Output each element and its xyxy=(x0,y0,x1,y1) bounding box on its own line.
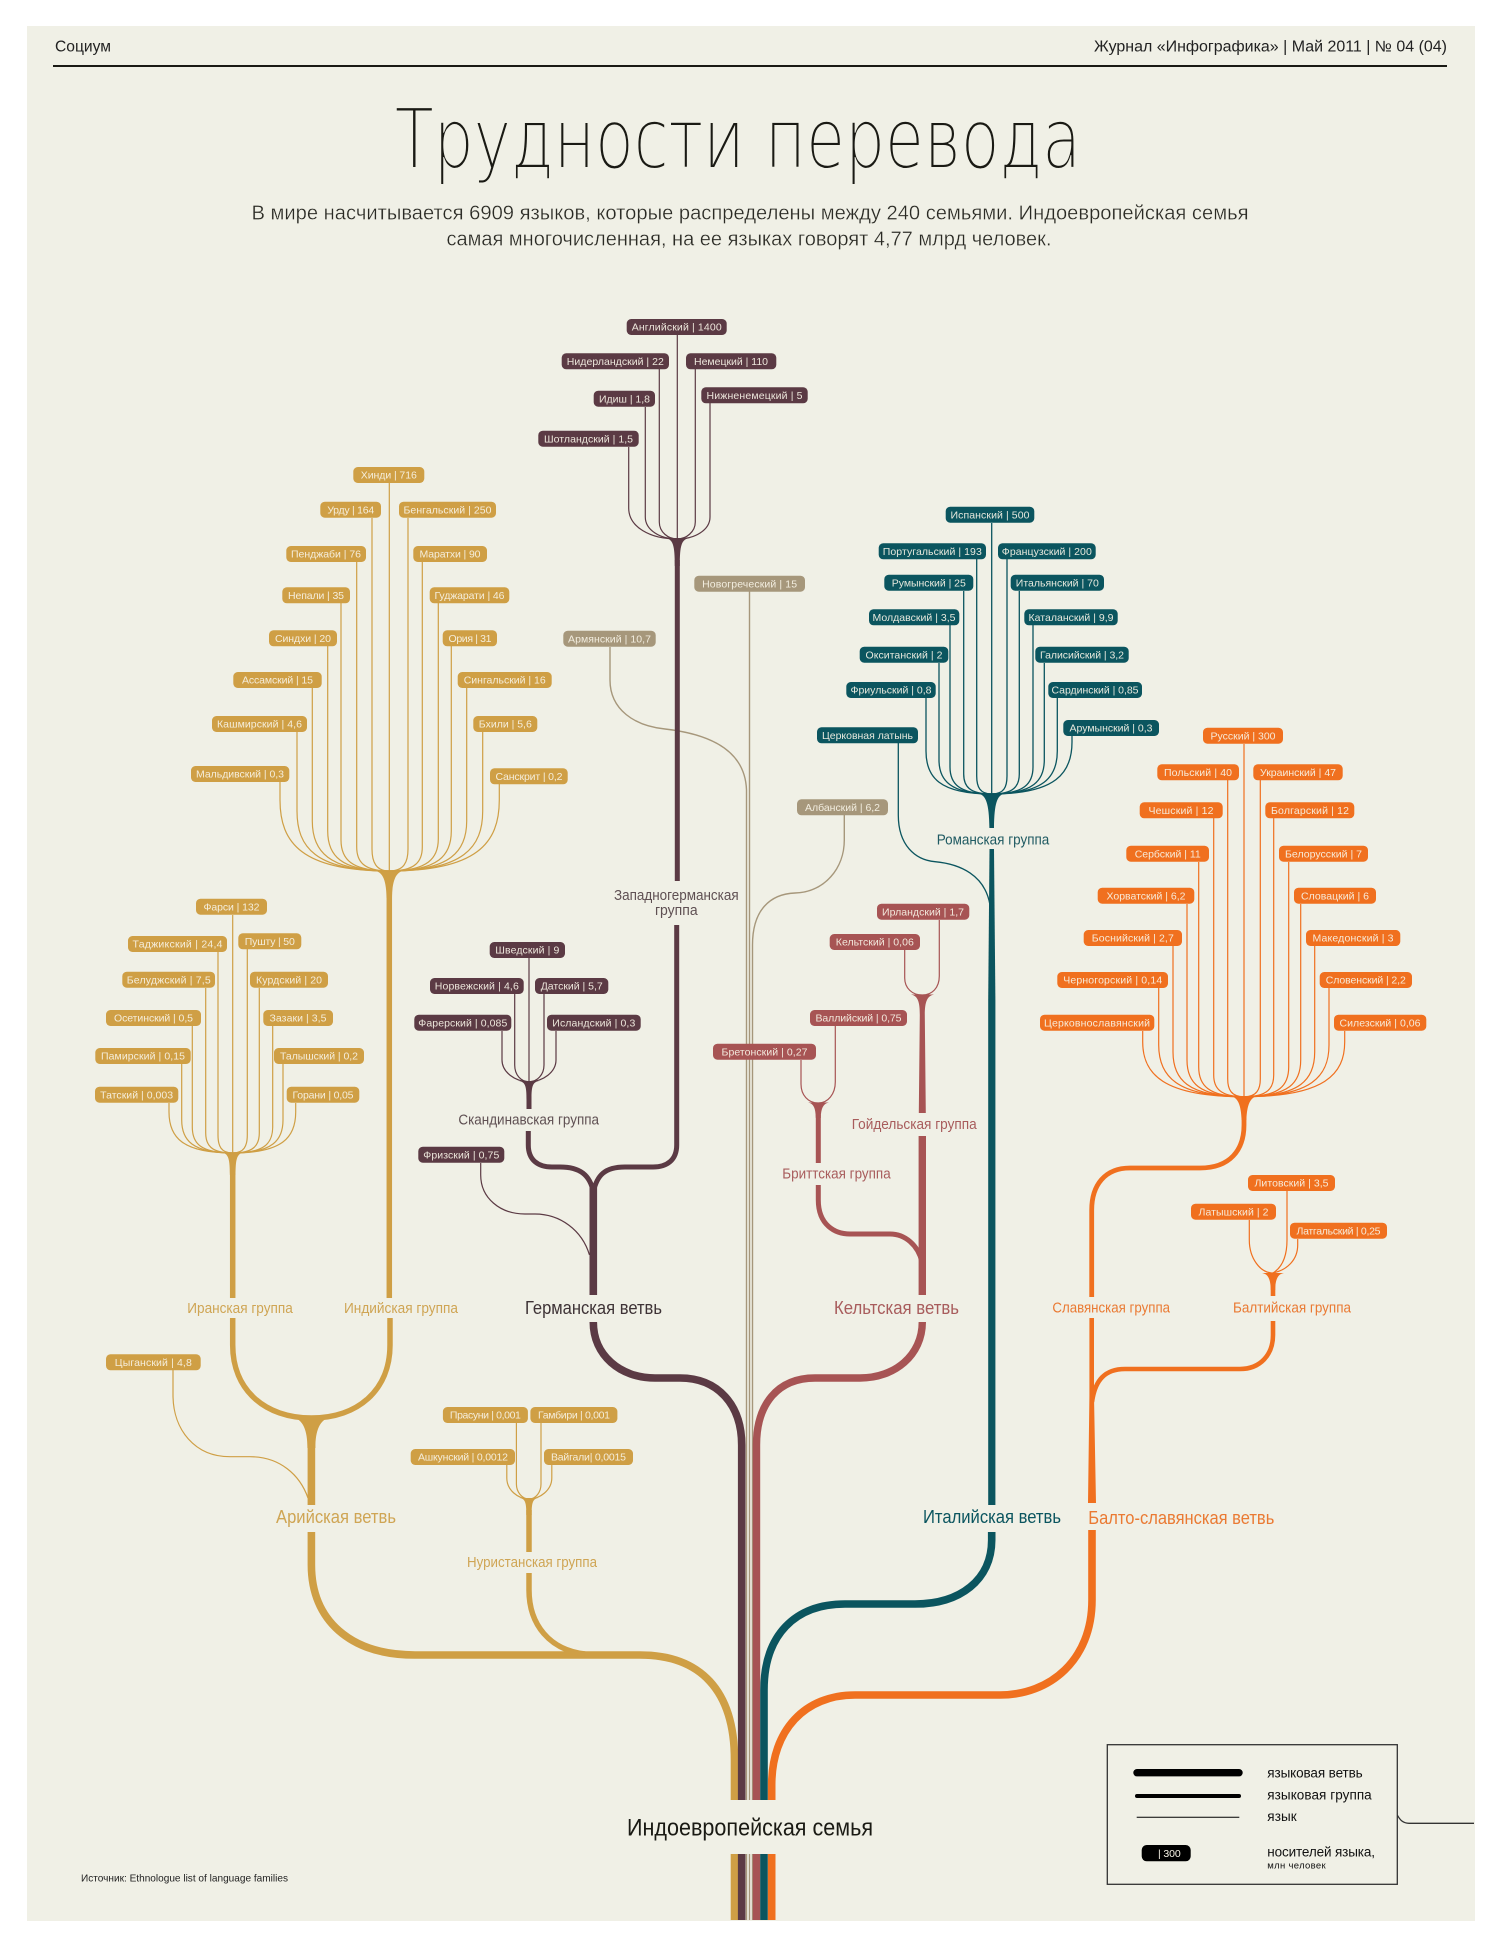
tag: Кашмирский xyxy=(212,716,307,732)
tag: Непали xyxy=(282,587,350,603)
labels: Balto-Slavic branch: Славянская группа xyxy=(1052,1301,1171,1317)
tag: Арумынский: Арумынский | 0,3 xyxy=(1070,723,1153,735)
magazine issue: Журнал «Инфографика» | Май 2011 | № 04 (04) xyxy=(1094,38,1447,56)
tag: Французский: Французский | 200 xyxy=(1002,546,1092,558)
tag: Идиш: Идиш | 1,8 xyxy=(599,393,650,405)
tag: Румынский: Румынский | 25 xyxy=(892,577,966,589)
tag: Галисийский: Галисийский | 3,2 xyxy=(1040,649,1124,661)
tag: Ория xyxy=(443,630,497,646)
labels: Balto-Slavic branch: Балто-славянская ветвь xyxy=(1088,1508,1274,1528)
tag: Таджикский: Таджикский | 24,4 xyxy=(132,939,223,951)
thick branches: Balto-Slavic xyxy=(772,1115,1273,1920)
branch: Germanic xyxy=(414,319,808,1920)
tag: Нижненемецкий xyxy=(701,387,808,403)
tag: Украинский xyxy=(1253,764,1343,780)
tag: Бретонский xyxy=(713,1044,816,1060)
language lines: Celtic xyxy=(801,920,939,1103)
tag: Ашкунский: Ашкунский | 0,0012 xyxy=(418,1452,508,1464)
thick branches: Italic xyxy=(764,1532,992,1920)
tag: Румынский xyxy=(884,575,973,591)
tag: Португальский: Португальский | 193 xyxy=(883,546,982,558)
tag: Памирский xyxy=(95,1048,191,1064)
thick branches: Aryan xyxy=(233,893,734,1920)
tag: Урду: Урду | 164 xyxy=(327,504,374,516)
tag: Фарерский: Фарерский | 0,085 xyxy=(418,1017,507,1029)
tag: Цыганский xyxy=(106,1354,201,1370)
language lines: West Germanic xyxy=(629,335,710,540)
labels: Celtic branch xyxy=(782,1117,978,1318)
branch: Celtic xyxy=(713,904,978,1920)
tag: Валлийский xyxy=(810,1010,907,1026)
tag: Испанский xyxy=(946,507,1034,523)
labels: Celtic branch: Гойдельская группа xyxy=(852,1117,978,1133)
tag: Кельтский: Кельтский | 0,06 xyxy=(836,937,914,949)
tag: Хинди: Хинди | 716 xyxy=(361,470,417,482)
tag: Нидерландский xyxy=(562,353,669,369)
tag: Немецкий: Немецкий | 110 xyxy=(694,356,768,368)
tag: Синдхи xyxy=(269,630,337,646)
tag: Нижненемецкий: Нижненемецкий | 5 xyxy=(706,390,803,402)
branch: Italic xyxy=(764,507,1159,1920)
thick branches: Germanic xyxy=(528,560,742,1920)
tag: Ашкунский xyxy=(411,1449,515,1465)
tag: Прасуни xyxy=(443,1407,528,1423)
tag: Португальский xyxy=(879,543,986,559)
legend: speakers tag: носителей языка, xyxy=(1267,1844,1375,1860)
tag: Черногорский: Черногорский | 0,14 xyxy=(1063,975,1162,987)
tag: Памирский: Памирский | 0,15 xyxy=(101,1051,185,1063)
tag: Датский xyxy=(535,978,608,994)
junction flares and taper: Balto-Slavic xyxy=(1088,1096,1284,1503)
tags: Indian group xyxy=(191,467,568,784)
labels: Italic branch: Романская группа xyxy=(937,832,1050,848)
tag: Сингальский xyxy=(458,672,552,688)
language lines: Scandinavian xyxy=(481,958,590,1255)
language lines: Slavic xyxy=(1143,744,1345,1098)
labels: Balto-Slavic branch xyxy=(1052,1301,1352,1528)
tags: Germanic xyxy=(414,319,808,1163)
tag: Бхили xyxy=(473,716,537,732)
tag: Словацкий: Словацкий | 6 xyxy=(1301,890,1369,902)
legend xyxy=(1107,1745,1397,1884)
tag: Синдхи: Синдхи | 20 xyxy=(275,633,331,645)
labels: Aryan branch: Иранская группа xyxy=(187,1301,294,1317)
legend: speakers tag: млн человек xyxy=(1267,1860,1327,1872)
tag: Фарси xyxy=(196,899,267,915)
title: Трудности перевода xyxy=(395,92,1081,188)
tag: Гамбири xyxy=(530,1407,617,1423)
tag: Мальдивский: Мальдивский | 0,3 xyxy=(196,769,284,781)
tag: Талышский xyxy=(274,1048,364,1064)
tag: Белорусский xyxy=(1279,846,1368,862)
tag: Нидерландский: Нидерландский | 22 xyxy=(567,356,664,368)
tag: Хорватский xyxy=(1098,888,1194,904)
labels: Balto-Slavic branch: Балтийская группа xyxy=(1233,1301,1352,1317)
tag: Фризский: Фризский | 0,75 xyxy=(423,1149,499,1161)
tag: Маратхи xyxy=(413,546,487,562)
tag: Арумынский xyxy=(1063,720,1159,736)
tag: Прасуни: Прасуни | 0,001 xyxy=(450,1410,521,1422)
tag: Литовский xyxy=(1248,1175,1335,1191)
connector lines: tan xyxy=(610,591,844,1920)
language lines: Romance xyxy=(898,523,1072,905)
tag: Норвежский xyxy=(430,978,524,994)
tag: Белорусский: Белорусский | 7 xyxy=(1285,848,1362,860)
tag: Курдский: Курдский | 20 xyxy=(256,974,322,986)
tag: Урду xyxy=(320,502,381,518)
tag: Вайгали: Вайгали| 0,0015 xyxy=(551,1452,626,1464)
tag: Английский: Английский | 1400 xyxy=(632,322,722,334)
section name: Социум xyxy=(55,38,111,56)
tag: Польский xyxy=(1157,764,1239,780)
tag: Фарси: Фарси | 132 xyxy=(204,901,260,913)
tag: Шотландский: Шотландский | 1,5 xyxy=(544,433,633,445)
labels: Aryan branch xyxy=(187,1301,598,1571)
tag: Окситанский: Окситанский | 2 xyxy=(866,649,943,661)
tag: Албанский xyxy=(797,799,888,815)
tag: Белуджский: Белуджский | 7,5 xyxy=(127,974,211,986)
tag: Чешский: Чешский | 12 xyxy=(1148,805,1214,817)
tag: Фриульский: Фриульский | 0,8 xyxy=(850,685,932,697)
labels: Aryan branch: Арийская ветвь xyxy=(276,1507,396,1527)
legend: language line: язык xyxy=(1267,1809,1297,1824)
tag: Церковная латынь: Церковная латынь xyxy=(822,730,914,742)
source: Источник: Ethnologue list of language families xyxy=(81,1872,288,1884)
tag: Английский xyxy=(627,319,727,335)
tag: Осетинский xyxy=(106,1010,201,1026)
tag: Польский: Польский | 40 xyxy=(1164,767,1232,779)
tag: Сардинский xyxy=(1048,682,1142,698)
junction flare and taper: Italic xyxy=(978,794,1005,1505)
tag: Курдский xyxy=(250,972,328,988)
subtitle xyxy=(252,202,1248,250)
tag: Исландский xyxy=(547,1015,641,1031)
tag: Македонский: Македонский | 3 xyxy=(1312,933,1394,945)
tag: Ирландский: Ирландский | 1,7 xyxy=(882,906,964,918)
tag: Македонский xyxy=(1306,930,1400,946)
tag: Пушту xyxy=(238,933,301,949)
tag: Гуджарати xyxy=(430,587,509,603)
tag: Украинский: Украинский | 47 xyxy=(1260,767,1336,779)
tag: Белуджский xyxy=(122,972,215,988)
labels: Germanic branch: Скандинавская группа xyxy=(458,1112,600,1128)
tag: Зазаки xyxy=(263,1010,333,1026)
tag: Горани: Горани | 0,05 xyxy=(292,1089,354,1101)
tag: Силезский: Силезский | 0,06 xyxy=(1340,1017,1421,1029)
tag: Хинди xyxy=(353,467,424,483)
tag: Мальдивский xyxy=(191,766,289,782)
tag: Санскрит: Санскрит | 0,2 xyxy=(496,771,563,783)
tag: Новогреческий xyxy=(694,576,805,592)
thick branches: Celtic xyxy=(756,1115,922,1920)
tag: Армянский xyxy=(563,631,656,647)
tag: Болгарский xyxy=(1265,802,1354,818)
tag: Армянский: Армянский | 10,7 xyxy=(568,633,651,645)
tag: Вайгали xyxy=(544,1449,633,1465)
tag: Фриульский xyxy=(846,682,936,698)
language lines: Iranian group xyxy=(169,915,308,1498)
tan languages: Greek, Armenian, Albanian xyxy=(563,576,888,1920)
tag: Шведский xyxy=(490,942,565,958)
tag: Боснийский xyxy=(1084,930,1182,946)
tag: Латышский xyxy=(1191,1204,1276,1220)
tag: Русский xyxy=(1203,728,1283,744)
labels: Celtic branch: Кельтская ветвь xyxy=(834,1298,959,1318)
tag: Пенджаби: Пенджаби | 76 xyxy=(291,549,361,561)
tag: Бретонский: Бретонский | 0,27 xyxy=(722,1046,808,1058)
tag: Гуджарати: Гуджарати | 46 xyxy=(434,590,505,602)
tag: Словацкий xyxy=(1294,888,1376,904)
family label: Индоевропейская семья xyxy=(627,1814,873,1842)
tag: Словенский: Словенский | 2,2 xyxy=(1326,975,1406,987)
tag: Чешский xyxy=(1140,802,1223,818)
tag: Каталанский xyxy=(1024,609,1118,625)
legend: branch line: языковая ветвь xyxy=(1267,1766,1363,1780)
labels: Celtic branch: Бриттская группа xyxy=(782,1166,892,1182)
tag: Датский: Датский | 5,7 xyxy=(541,981,603,993)
tag: Ория: Ория | 31 xyxy=(448,633,492,645)
labels: Germanic branch: группа xyxy=(655,903,699,919)
tag: Испанский: Испанский | 500 xyxy=(950,509,1030,521)
tag: Окситанский xyxy=(860,647,948,663)
tags: tan xyxy=(563,576,888,815)
tag: Литовский: Литовский | 3,5 xyxy=(1254,1178,1329,1190)
legend: speakers tag xyxy=(1142,1844,1375,1872)
junction flares and taper: Celtic xyxy=(808,994,934,1118)
tag: Татский: Татский | 0,003 xyxy=(100,1089,173,1101)
junction flares: Germanic xyxy=(519,538,690,1100)
legend: group line: языковая группа xyxy=(1267,1788,1372,1802)
tag: Непали: Непали | 35 xyxy=(288,590,344,602)
junction flares: Aryan xyxy=(222,870,538,1515)
tag: Латгальский: Латгальский | 0,25 xyxy=(1296,1225,1381,1237)
tag: Албанский: Албанский | 6,2 xyxy=(805,802,880,814)
tag: Латгальский xyxy=(1290,1223,1387,1239)
tag: Бенгальский: Бенгальский | 250 xyxy=(404,504,492,516)
tag: Словенский xyxy=(1320,972,1412,988)
tag: Шотландский xyxy=(538,431,639,447)
tag: Исландский: Исландский | 0,3 xyxy=(552,1017,635,1029)
tag: Боснийский: Боснийский | 2,7 xyxy=(1092,933,1174,945)
tag: Цыганский: Цыганский | 4,8 xyxy=(115,1357,192,1369)
tag: Церковнославянский: Церковнославянский xyxy=(1044,1017,1150,1029)
subtitle: В мире насчитывается 6909 языков, которые распределены между 240 семьями. Индоевропейская семья xyxy=(252,202,1248,224)
tag: Татский xyxy=(95,1087,178,1103)
tag: Галисийский xyxy=(1035,647,1129,663)
labels: Germanic branch xyxy=(458,888,739,1318)
tag: Сербский xyxy=(1126,846,1209,862)
labels: Italic branch: Италийская ветвь xyxy=(923,1507,1061,1527)
tags: Romance xyxy=(817,507,1159,743)
tag: Шведский: Шведский | 9 xyxy=(495,945,559,957)
tag: Новогреческий: Новогреческий | 15 xyxy=(702,578,797,590)
language lines: Baltic xyxy=(1249,1191,1298,1273)
tag: Церковная латынь xyxy=(817,727,918,743)
labels: Germanic branch: Германская ветвь xyxy=(525,1298,662,1318)
tag: Силезский xyxy=(1334,1015,1426,1031)
tag: Идиш xyxy=(594,391,655,407)
labels: Italic branch xyxy=(923,832,1061,1527)
tag: Молдавский: Молдавский | 3,5 xyxy=(872,612,956,624)
connector: legend to edge xyxy=(1397,1815,1474,1823)
tag: Зазаки: Зазаки | 3,5 xyxy=(270,1013,327,1025)
legend: speakers tag: | 300 xyxy=(1158,1848,1181,1860)
tag: Итальянский xyxy=(1011,575,1104,591)
labels: Aryan branch: Индийская группа xyxy=(344,1301,459,1317)
tag: Пушту: Пушту | 50 xyxy=(245,936,295,948)
tag: Черногорский xyxy=(1057,972,1168,988)
tag: Молдавский xyxy=(869,609,959,625)
language lines: Indian group xyxy=(280,483,499,872)
labels: Aryan branch: Нуристанская группа xyxy=(467,1555,598,1571)
tag: Фризский xyxy=(418,1147,504,1163)
tag: Латышский: Латышский | 2 xyxy=(1198,1206,1269,1218)
tag: Итальянский: Итальянский | 70 xyxy=(1016,577,1099,589)
branch: Aryan xyxy=(95,467,734,1920)
branch: Balto-Slavic xyxy=(772,728,1426,1920)
tags: Nuristani group xyxy=(411,1407,633,1465)
tag: Кашмирский: Кашмирский | 4,6 xyxy=(217,719,302,731)
tag: Ирландский xyxy=(877,904,969,920)
tag: Бенгальский xyxy=(399,502,496,518)
tag: Ассамский xyxy=(233,672,322,688)
header xyxy=(53,38,1447,67)
tag: Сардинский: Сардинский | 0,85 xyxy=(1052,685,1139,697)
tag: Болгарский: Болгарский | 12 xyxy=(1271,805,1349,817)
labels: Germanic branch: Западногерманская xyxy=(614,888,739,904)
tag: Валлийский: Валлийский | 0,75 xyxy=(816,1013,902,1025)
tags: Celtic xyxy=(713,904,969,1060)
tag: Горани xyxy=(287,1087,359,1103)
tag: Французский xyxy=(998,543,1096,559)
tag: Немецкий xyxy=(686,353,776,369)
tag: Кельтский xyxy=(830,934,920,950)
language lines: Nuristani group xyxy=(507,1423,552,1499)
tag: Хорватский: Хорватский | 6,2 xyxy=(1106,890,1186,902)
tag: Пенджаби xyxy=(286,546,366,562)
tag: Санскрит xyxy=(490,768,568,784)
tag: Бхили: Бхили | 5,6 xyxy=(479,719,532,731)
tag: Каталанский: Каталанский | 9,9 xyxy=(1028,612,1114,624)
tag: Таджикский xyxy=(128,936,227,952)
tags: Iranian group xyxy=(95,899,364,1370)
tag: Церковнославянский xyxy=(1040,1015,1154,1031)
tags: Slavic and Baltic xyxy=(1040,728,1426,1239)
tag: Норвежский: Норвежский | 4,6 xyxy=(435,981,519,993)
tag: Осетинский: Осетинский | 0,5 xyxy=(114,1013,193,1025)
tag: Гамбири: Гамбири | 0,001 xyxy=(538,1410,610,1422)
tag: Ассамский: Ассамский | 15 xyxy=(242,675,313,687)
tag: Талышский: Талышский | 0,2 xyxy=(280,1051,358,1063)
tag: Сингальский: Сингальский | 16 xyxy=(464,675,546,687)
subtitle: самая многочисленная, на ее языках говорят 4,77 млрд человек. xyxy=(446,228,1052,250)
tag: Русский: Русский | 300 xyxy=(1210,730,1276,742)
tag: Сербский: Сербский | 11 xyxy=(1135,848,1201,860)
tag: Фарерский xyxy=(414,1015,511,1031)
tag: Маратхи: Маратхи | 90 xyxy=(420,549,481,561)
